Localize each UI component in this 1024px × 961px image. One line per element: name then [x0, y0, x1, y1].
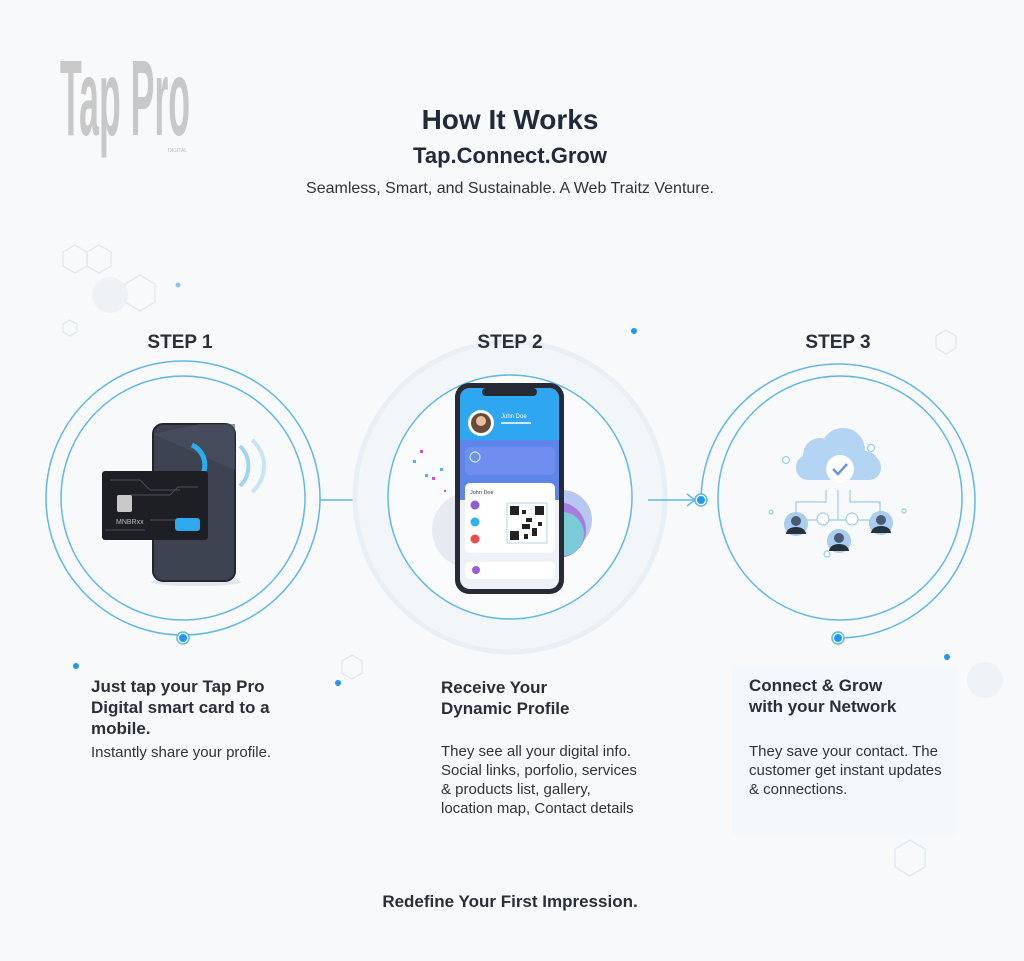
- panel: step1 circles: [46, 361, 320, 635]
- arrow 2: [648, 494, 695, 506]
- text: step 2: [441, 678, 637, 817]
- text: step 2: They see all your digital info.: [441, 743, 631, 760]
- step1 icon phone+card: MNBRxx: [116, 519, 144, 526]
- step2 icon phone profile: [413, 383, 592, 594]
- logo: DIGITAL: [168, 148, 187, 154]
- title: How It Works: [422, 104, 598, 135]
- step2 icon phone profile: John Doe: [501, 414, 527, 420]
- text: step 3: & connections.: [749, 781, 847, 798]
- arrow 1: [320, 494, 368, 506]
- step3 icon cloud network: [769, 428, 906, 557]
- text: step 2: Receive Your: [441, 678, 547, 697]
- text: step 3: with your Network: [749, 697, 896, 716]
- text: step 3: Connect & Grow: [749, 676, 882, 695]
- text: step 1: Just tap your Tap Pro Digital smart card to a mobile.: [91, 677, 270, 738]
- text: step 3: They save your contact. The: [749, 743, 938, 760]
- text: step 2: location map, Contact details: [441, 800, 634, 817]
- text: step 1: Instantly share your profile.: [91, 744, 271, 761]
- panel: step3 circles: [701, 364, 975, 638]
- text: step 3: [749, 676, 942, 798]
- step 2 label: STEP 2: [477, 332, 543, 353]
- text: step 2: Dynamic Profile: [441, 699, 570, 718]
- panel: step2 circles: [355, 342, 665, 652]
- step2 icon phone profile: John Doe: [470, 490, 494, 496]
- logo: Tap Pro: [60, 37, 190, 158]
- text: step 3: customer get instant updates: [749, 762, 942, 779]
- step labels: STEP 1: [147, 332, 213, 353]
- step3 text box background: [732, 665, 958, 835]
- footer: Redefine Your First Impression.: [382, 892, 638, 911]
- text: step 2: Social links, porfolio, services: [441, 762, 637, 779]
- subtitle: tagline: Tap.Connect.Grow: [413, 143, 607, 168]
- step1 icon phone+card: [102, 424, 264, 586]
- subtitle: Seamless, Smart, and Sustainable. A Web Traitz Venture.: [306, 180, 714, 197]
- step 3 label: STEP 3: [805, 332, 871, 353]
- text: step 2: & products list, gallery,: [441, 781, 591, 798]
